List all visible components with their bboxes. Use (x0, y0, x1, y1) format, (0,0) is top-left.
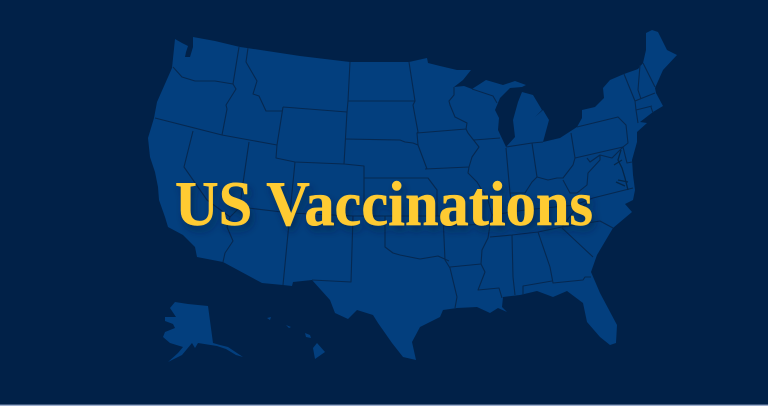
map of the United States (148, 30, 677, 362)
Alaska (163, 302, 243, 362)
Chesapeake Bay (614, 150, 628, 190)
state borders (155, 47, 655, 308)
title: US Vaccinations (175, 169, 593, 239)
contiguous states landmass (148, 30, 677, 360)
Hawaii (267, 317, 325, 359)
